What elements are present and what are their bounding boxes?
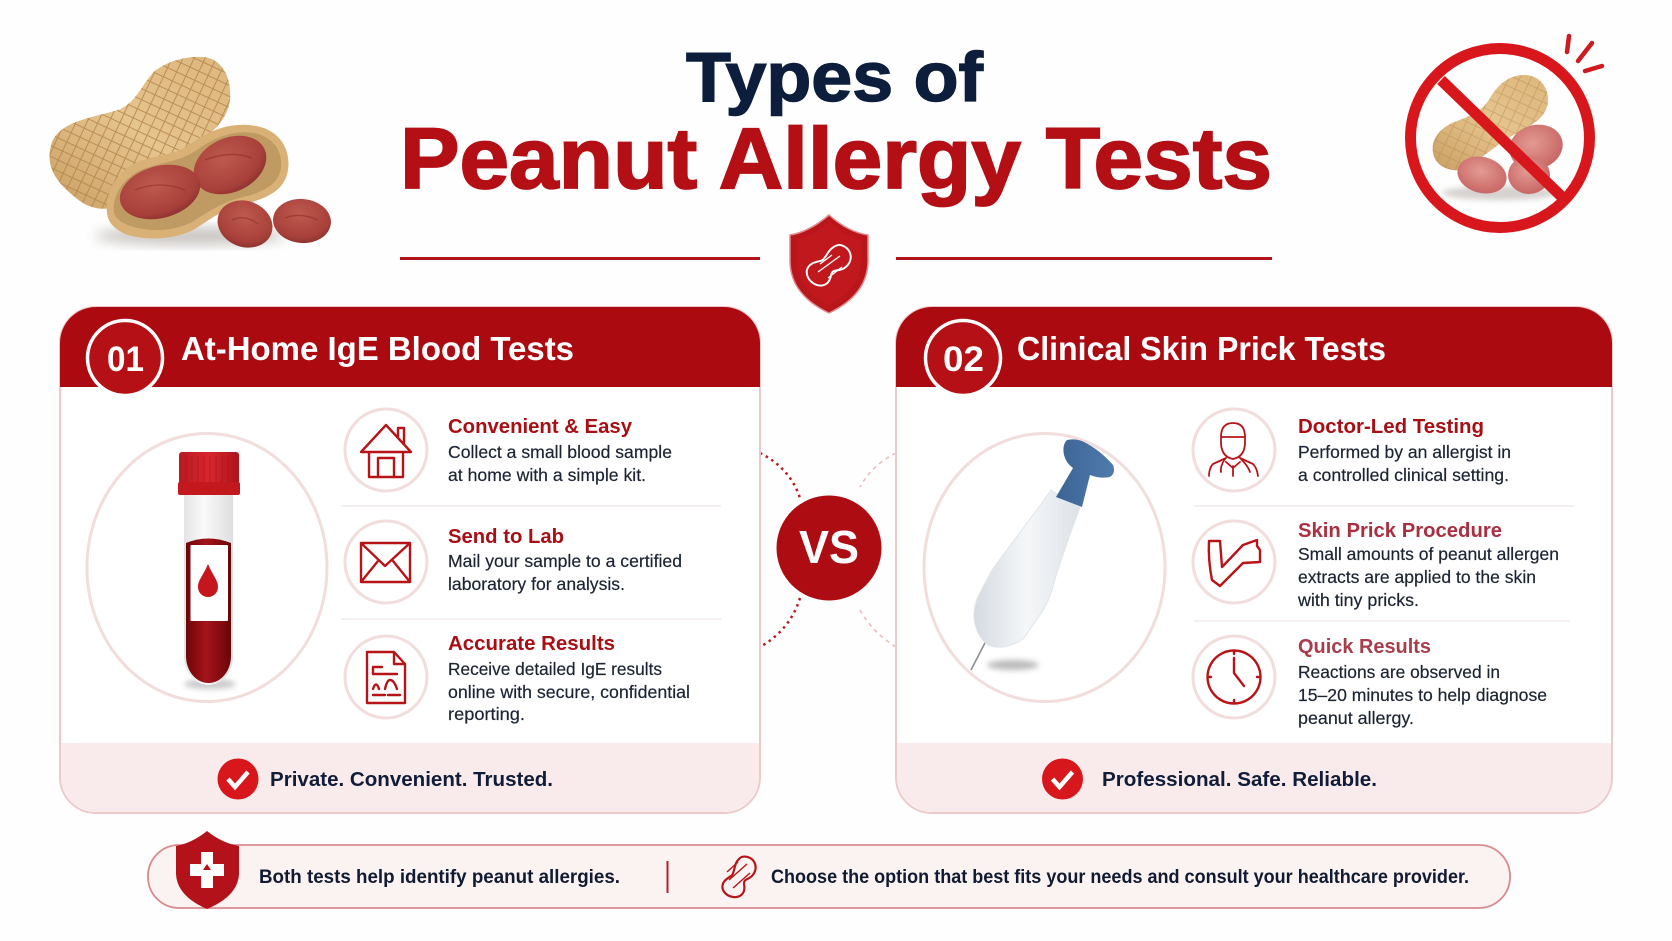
panel footer band bbox=[61, 743, 759, 812]
feature: quick results bbox=[1193, 635, 1547, 728]
VS badge: VS bbox=[799, 521, 859, 573]
title bbox=[400, 38, 1272, 207]
icon: clock bbox=[1208, 650, 1261, 704]
feature: skin prick procedure: Skin Prick Procedure bbox=[1298, 519, 1502, 542]
feature: skin prick procedure: extracts are applied to the skin bbox=[1298, 567, 1536, 587]
feature: accurate results: online with secure, confidential bbox=[448, 682, 690, 702]
feature: convenient and easy: Collect a small blood sample bbox=[448, 442, 672, 462]
panel background bbox=[896, 307, 1612, 813]
icon: peanut outline bbox=[720, 852, 759, 901]
icon: envelope bbox=[361, 543, 410, 582]
number badge 01: 01 bbox=[107, 340, 144, 379]
separator bbox=[666, 861, 668, 893]
icon: crossed-out peanut bbox=[1410, 36, 1602, 228]
feature: skin prick procedure: with tiny pricks. bbox=[1297, 590, 1419, 610]
feature: quick results: Quick Results bbox=[1298, 635, 1431, 658]
connector: VS dotted arcs bbox=[760, 453, 896, 647]
feature: send to lab: Send to Lab bbox=[448, 525, 564, 548]
number badge 02 bbox=[926, 320, 1000, 396]
icon: medical shield bbox=[176, 831, 239, 909]
title line 2: Peanut Allergy Tests bbox=[400, 111, 1272, 207]
illustration: peanuts top left bbox=[49, 57, 333, 255]
panel: clinical skin prick tests bbox=[896, 307, 1612, 813]
banner: bottom note bbox=[148, 831, 1510, 909]
feature: convenient and easy: at home with a simple kit. bbox=[448, 465, 646, 485]
feature: skin prick procedure: Small amounts of peanut allergen bbox=[1298, 544, 1559, 564]
feature: doctor-led testing: Performed by an allergist in bbox=[1298, 442, 1511, 462]
panel heading: At-Home IgE Blood Tests bbox=[181, 330, 574, 367]
panel footer band bbox=[897, 743, 1611, 812]
note text 2: Choose the option that best fits your needs and consult your healthcare provider. bbox=[771, 867, 1469, 888]
feature: accurate results: Accurate Results bbox=[448, 632, 615, 655]
number badge 01 bbox=[88, 320, 162, 396]
banner background bbox=[148, 845, 1510, 908]
icon: report document bbox=[367, 652, 405, 703]
feature: send to lab bbox=[345, 521, 682, 603]
tagline with check bbox=[1042, 758, 1377, 800]
feature: accurate results: reporting. bbox=[448, 704, 525, 724]
illustration: skin prick lancet bbox=[924, 434, 1165, 702]
title line 1: Types of bbox=[686, 38, 984, 116]
feature: quick results: peanut allergy. bbox=[1298, 708, 1414, 728]
feature: quick results: 15–20 minutes to help diagnose bbox=[1298, 685, 1547, 705]
feature: accurate results: Receive detailed IgE results bbox=[448, 659, 662, 679]
feature: doctor-led testing bbox=[1193, 409, 1511, 491]
title divider lines bbox=[400, 257, 1272, 260]
feature: doctor-led testing: Doctor-Led Testing bbox=[1298, 415, 1484, 438]
feature: accurate results bbox=[345, 632, 690, 724]
tagline with check: Professional. Safe. Reliable. bbox=[1102, 768, 1377, 791]
feature: skin prick procedure bbox=[1193, 519, 1559, 610]
panel heading: Clinical Skin Prick Tests bbox=[1017, 330, 1386, 367]
tagline with check bbox=[218, 758, 553, 800]
panel header band bbox=[60, 307, 760, 387]
panel background bbox=[60, 307, 760, 813]
note text 1: Both tests help identify peanut allergies. bbox=[259, 867, 620, 888]
feature: convenient and easy: Convenient & Easy bbox=[448, 415, 633, 438]
icon: doctor bbox=[1209, 423, 1258, 476]
panel header band bbox=[896, 307, 1612, 387]
illustration: blood tube bbox=[87, 434, 327, 702]
icon: arm bbox=[1209, 540, 1260, 586]
icon: peanut shield badge bbox=[790, 215, 868, 313]
feature: send to lab: laboratory for analysis. bbox=[448, 574, 625, 594]
tagline with check: Private. Convenient. Trusted. bbox=[270, 768, 553, 791]
feature: convenient and easy bbox=[345, 409, 672, 491]
panel: at-home IgE blood tests bbox=[60, 307, 760, 813]
icon: house bbox=[361, 425, 411, 477]
VS badge bbox=[776, 496, 882, 600]
feature: send to lab: Mail your sample to a certified bbox=[448, 551, 682, 571]
number badge 02: 02 bbox=[943, 340, 984, 379]
feature: quick results: Reactions are observed in bbox=[1298, 662, 1500, 682]
feature: doctor-led testing: a controlled clinical setting. bbox=[1298, 465, 1509, 485]
